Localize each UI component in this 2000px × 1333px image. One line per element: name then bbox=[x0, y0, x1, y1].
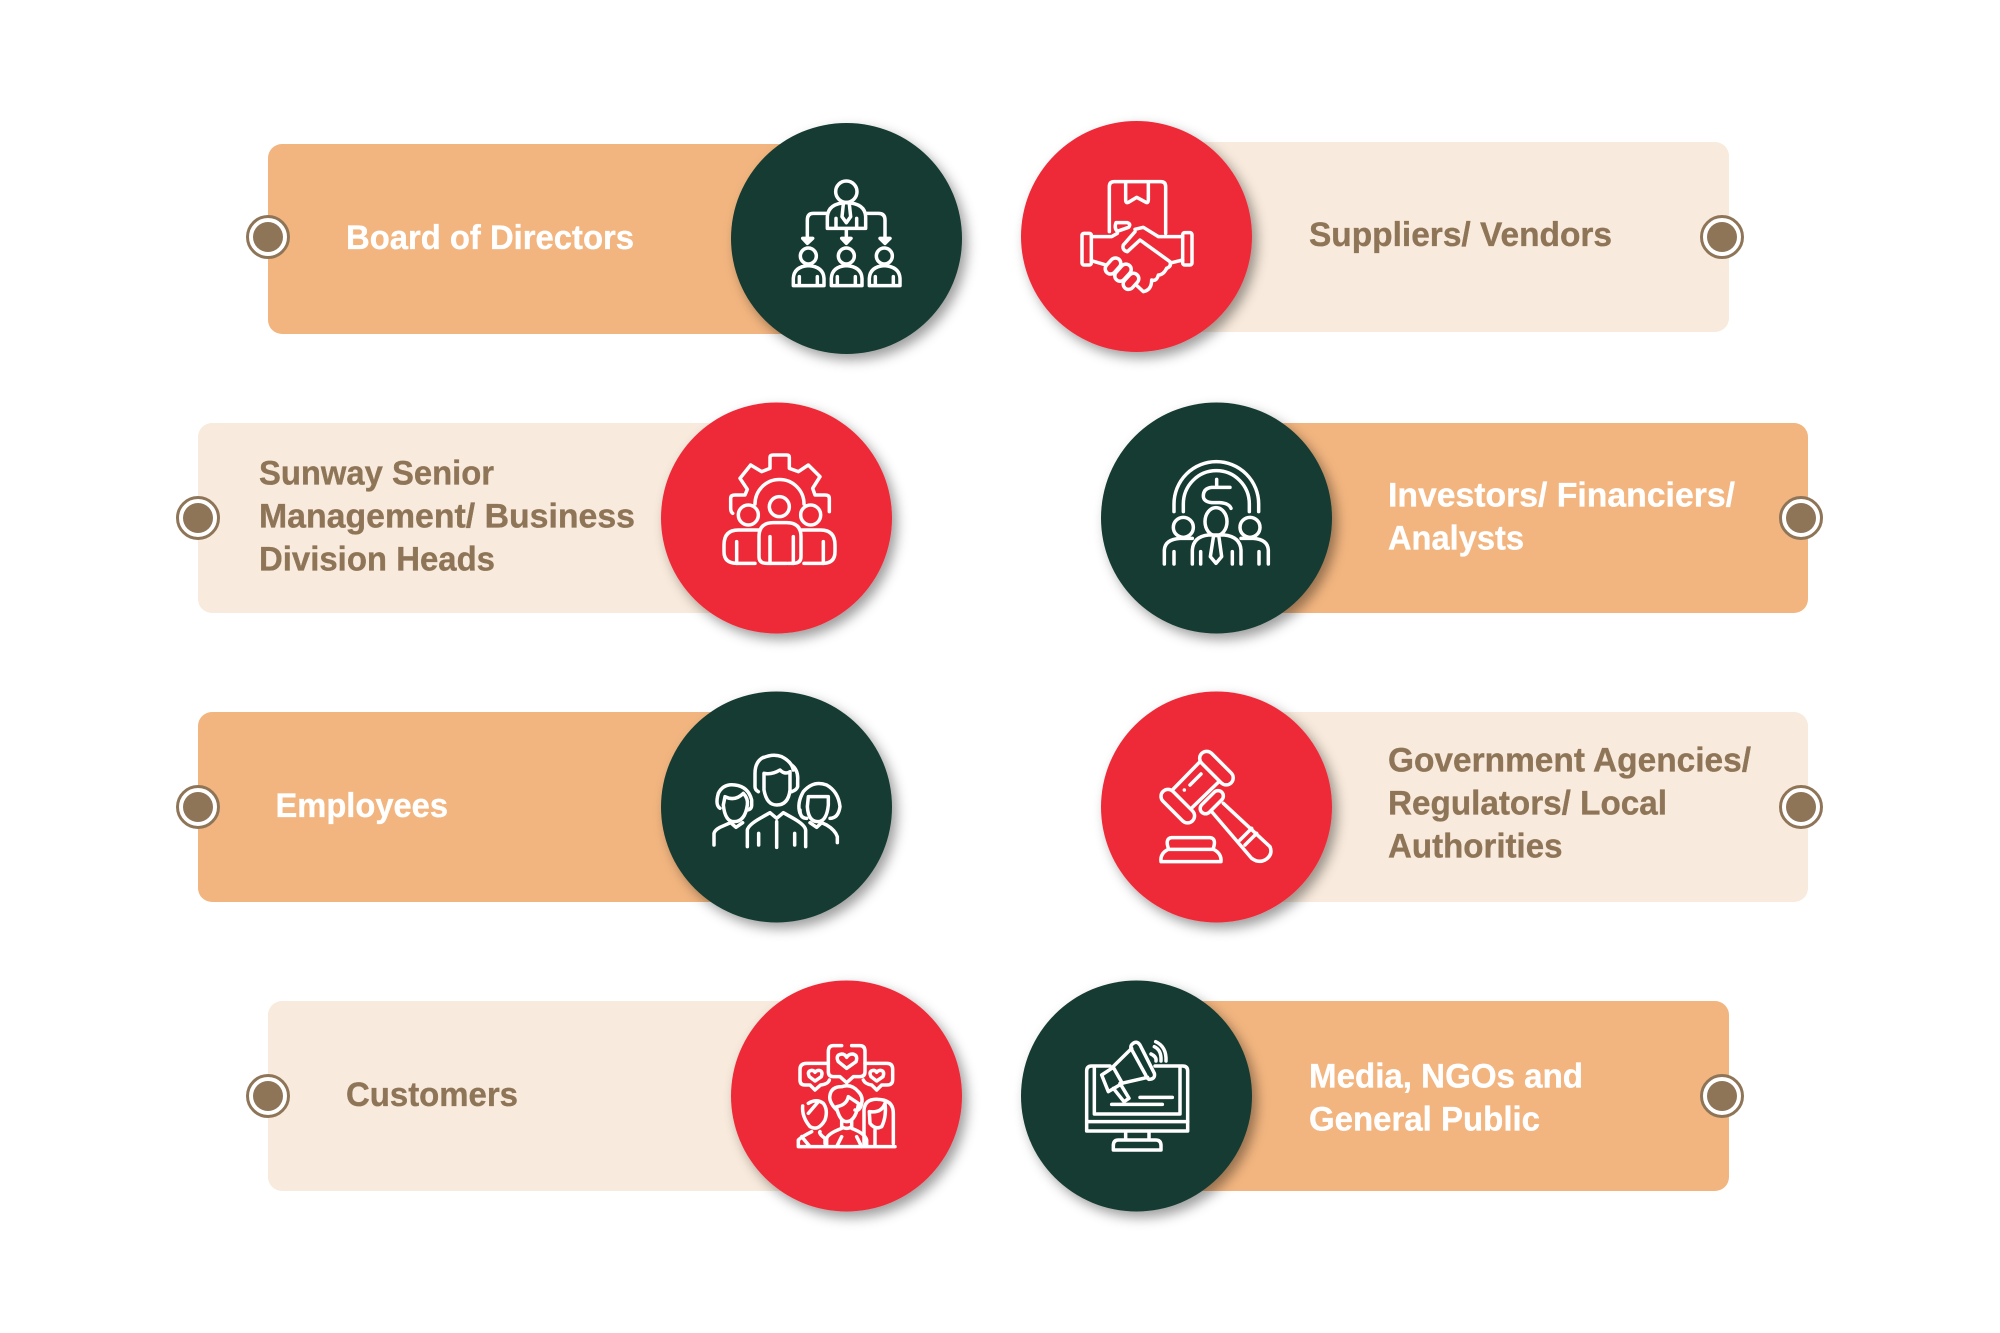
card: Sunway Senior Management bbox=[198, 423, 778, 613]
label text bbox=[259, 455, 635, 579]
circle badge bbox=[731, 123, 962, 354]
label text: Employees bbox=[276, 787, 448, 825]
circle badge bbox=[731, 980, 962, 1212]
panel: Employees bbox=[178, 692, 892, 922]
panel: Media, NGOs and General Public bbox=[1021, 980, 1742, 1212]
panel: Customers bbox=[248, 980, 962, 1212]
label text: Analysts bbox=[1388, 520, 1524, 558]
icon: org hierarchy bbox=[793, 181, 900, 286]
circle badge bbox=[1021, 121, 1252, 352]
icon: monitor with megaphone bbox=[1087, 1042, 1188, 1150]
panel: Sunway Senior Management bbox=[178, 402, 892, 634]
label text: Regulators/ Local bbox=[1388, 785, 1667, 823]
label text: Board of Directors bbox=[346, 219, 634, 257]
label text bbox=[1388, 742, 1752, 866]
label text: Division Heads bbox=[259, 541, 495, 579]
circle badge bbox=[661, 402, 892, 634]
panel: Investors bbox=[1101, 402, 1822, 634]
label text: Investors/ Financiers/ bbox=[1388, 476, 1736, 514]
circle badge bbox=[1021, 980, 1252, 1212]
connector dot bbox=[1780, 786, 1822, 828]
label text: Government Agencies/ bbox=[1388, 742, 1752, 780]
label text: General Public bbox=[1309, 1101, 1540, 1139]
label text: Customers bbox=[346, 1076, 518, 1114]
connector dot bbox=[1702, 216, 1742, 258]
connector dot bbox=[1780, 498, 1822, 538]
icon: handshake with parcel bbox=[1082, 182, 1192, 292]
card: Investors bbox=[1218, 423, 1808, 613]
icon: investors and dollar arc bbox=[1164, 462, 1268, 564]
label text: Authorities bbox=[1388, 828, 1562, 866]
label text bbox=[1309, 1058, 1583, 1139]
circle badge bbox=[661, 692, 892, 922]
card: Employees bbox=[198, 712, 778, 902]
icon: employees bbox=[714, 755, 840, 847]
icon: gavel bbox=[1158, 748, 1271, 862]
connector dot bbox=[178, 498, 218, 538]
connector dot bbox=[1702, 1076, 1742, 1116]
label text: Sunway Senior bbox=[259, 455, 494, 493]
label text bbox=[1388, 476, 1736, 558]
circle badge bbox=[1101, 402, 1332, 634]
label text: Suppliers/ Vendors bbox=[1309, 216, 1612, 254]
card: Suppliers/ Vendors bbox=[1140, 142, 1729, 332]
card: Media, NGOs and General Public bbox=[1140, 1001, 1729, 1191]
card: Board of Directors bbox=[268, 144, 848, 334]
card: Customers bbox=[268, 1001, 848, 1191]
panel: Government Agencies bbox=[1101, 692, 1822, 922]
label text: Management/ Business bbox=[259, 498, 635, 536]
connector dot bbox=[248, 1076, 288, 1116]
circle badge bbox=[1101, 692, 1332, 922]
connector dot bbox=[248, 216, 288, 258]
connector dot bbox=[178, 786, 218, 828]
label text: Media, NGOs and bbox=[1309, 1058, 1583, 1096]
panel: Board of Directors bbox=[248, 123, 962, 354]
icon: customers with hearts bbox=[798, 1046, 895, 1147]
icon: gear and team bbox=[724, 455, 835, 563]
panel: Suppliers/ Vendors bbox=[1021, 121, 1742, 352]
card: Government Agencies bbox=[1218, 712, 1808, 902]
